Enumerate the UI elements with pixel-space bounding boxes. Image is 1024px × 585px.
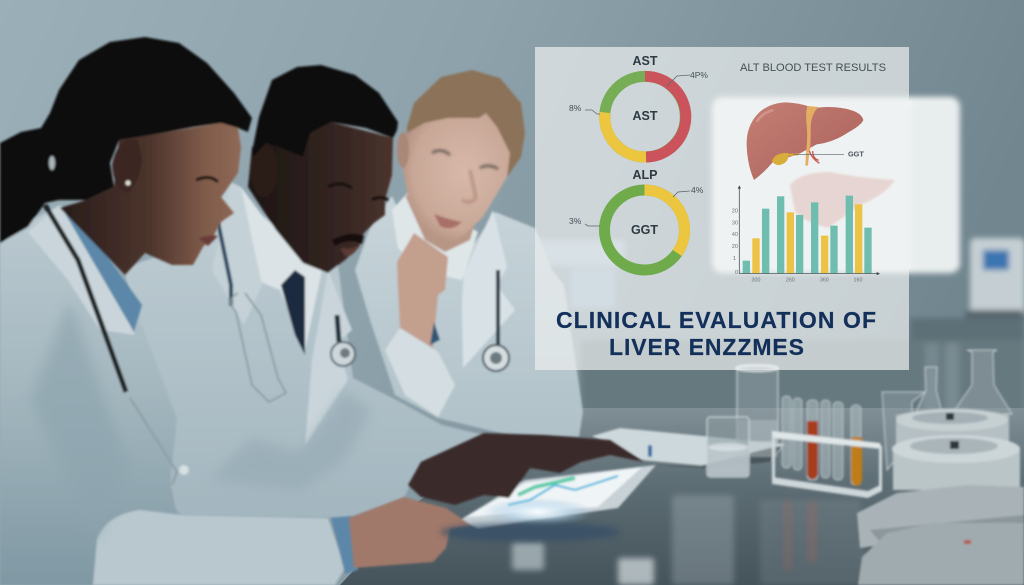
- axes: [739, 187, 879, 274]
- face: [248, 122, 393, 273]
- donut label: AST: AST: [632, 109, 658, 123]
- y axis labels: [732, 208, 738, 276]
- hands and tablet: [349, 433, 656, 568]
- heading: ALT blood test results: ALT BLOOD TEST RESULTS: [740, 62, 886, 74]
- stethoscope: [45, 205, 189, 485]
- title: CLINICAL EVALUATION OF: [556, 307, 876, 333]
- grey instrument boxes: [857, 485, 1024, 585]
- ghost liver behind chart: [790, 172, 895, 228]
- callout: 3%: 3%: [569, 216, 582, 226]
- y axis labels: 40: [732, 232, 738, 238]
- man's hand: [408, 433, 644, 505]
- heading: ALP: ALP: [632, 168, 658, 182]
- eyes, nose and lips: [432, 150, 498, 228]
- bar chart: [732, 185, 880, 284]
- callout: 4%: [673, 185, 704, 197]
- clipboard paper: [592, 428, 785, 468]
- donut chart: AST: [605, 76, 686, 157]
- sleeve: [385, 328, 455, 417]
- scrubs collar: [62, 208, 142, 332]
- round lab devices: [892, 408, 1020, 490]
- y axis labels: 1: [733, 256, 736, 262]
- coat: [355, 196, 583, 437]
- callout: 4P%: [667, 70, 708, 86]
- hand and forearm: [397, 233, 448, 348]
- lapel: [28, 206, 135, 335]
- water glass: [707, 417, 749, 477]
- x axis labels: 160: [854, 278, 862, 284]
- donut label: GGT: GGT: [631, 223, 658, 237]
- callout: 4%: 4%: [691, 185, 704, 195]
- ear: [112, 139, 142, 193]
- coat body: [0, 205, 181, 585]
- face and neck: [60, 123, 241, 275]
- large beaker: [736, 365, 778, 457]
- callout: 8%: [569, 103, 600, 114]
- y axis labels: 30: [732, 220, 738, 226]
- x axis labels: 360: [820, 278, 829, 284]
- woman's hand: [349, 497, 471, 568]
- person: right woman: [355, 70, 583, 437]
- arm fold shading: [210, 390, 372, 490]
- lab glassware and equipment: [512, 350, 1024, 585]
- liver illustration: GGT: [848, 149, 864, 158]
- stethoscope: [483, 270, 509, 371]
- coat fold shading: [30, 300, 130, 540]
- stethoscope: [218, 222, 355, 402]
- lab table: [340, 408, 1024, 585]
- x axis labels: 260: [786, 278, 795, 284]
- y axis labels: 20: [732, 244, 738, 250]
- shirt and neck: [392, 190, 478, 280]
- blurred foreground glassware: [512, 495, 816, 585]
- liver illustration: [747, 102, 864, 180]
- shirt and lapel: [212, 182, 352, 445]
- translucent info panel: [535, 47, 909, 370]
- title: LIVER ENZZMES: [609, 334, 804, 360]
- person: middle man: [124, 65, 484, 518]
- facial features: [328, 184, 388, 256]
- axis arrows: [738, 185, 880, 275]
- donut chart: GGT: [604, 190, 685, 270]
- cuff: [331, 516, 358, 574]
- x axis labels: 300: [752, 278, 760, 284]
- tablet: [460, 465, 656, 528]
- flasks: [882, 350, 1012, 470]
- hair: [0, 37, 252, 243]
- y axis labels: 0: [735, 270, 738, 276]
- bars: [743, 196, 872, 273]
- lower sleeve: [93, 510, 345, 585]
- callout: 8%: 8%: [569, 103, 582, 113]
- x axis labels: [752, 278, 862, 284]
- heading: AST: AST: [632, 54, 658, 68]
- lapel: [462, 210, 515, 368]
- eye and lips: [196, 177, 218, 246]
- hair: [407, 70, 525, 177]
- y axis labels: 20: [732, 208, 738, 214]
- coat: [124, 182, 484, 518]
- face: [403, 113, 514, 243]
- callout: 3%: [569, 216, 600, 226]
- hair: [253, 65, 398, 157]
- test tubes in rack: [772, 396, 882, 498]
- callout: 4P%: 4P%: [690, 70, 708, 80]
- person: left woman: [0, 37, 358, 585]
- title: [556, 307, 876, 360]
- tie: [281, 270, 305, 355]
